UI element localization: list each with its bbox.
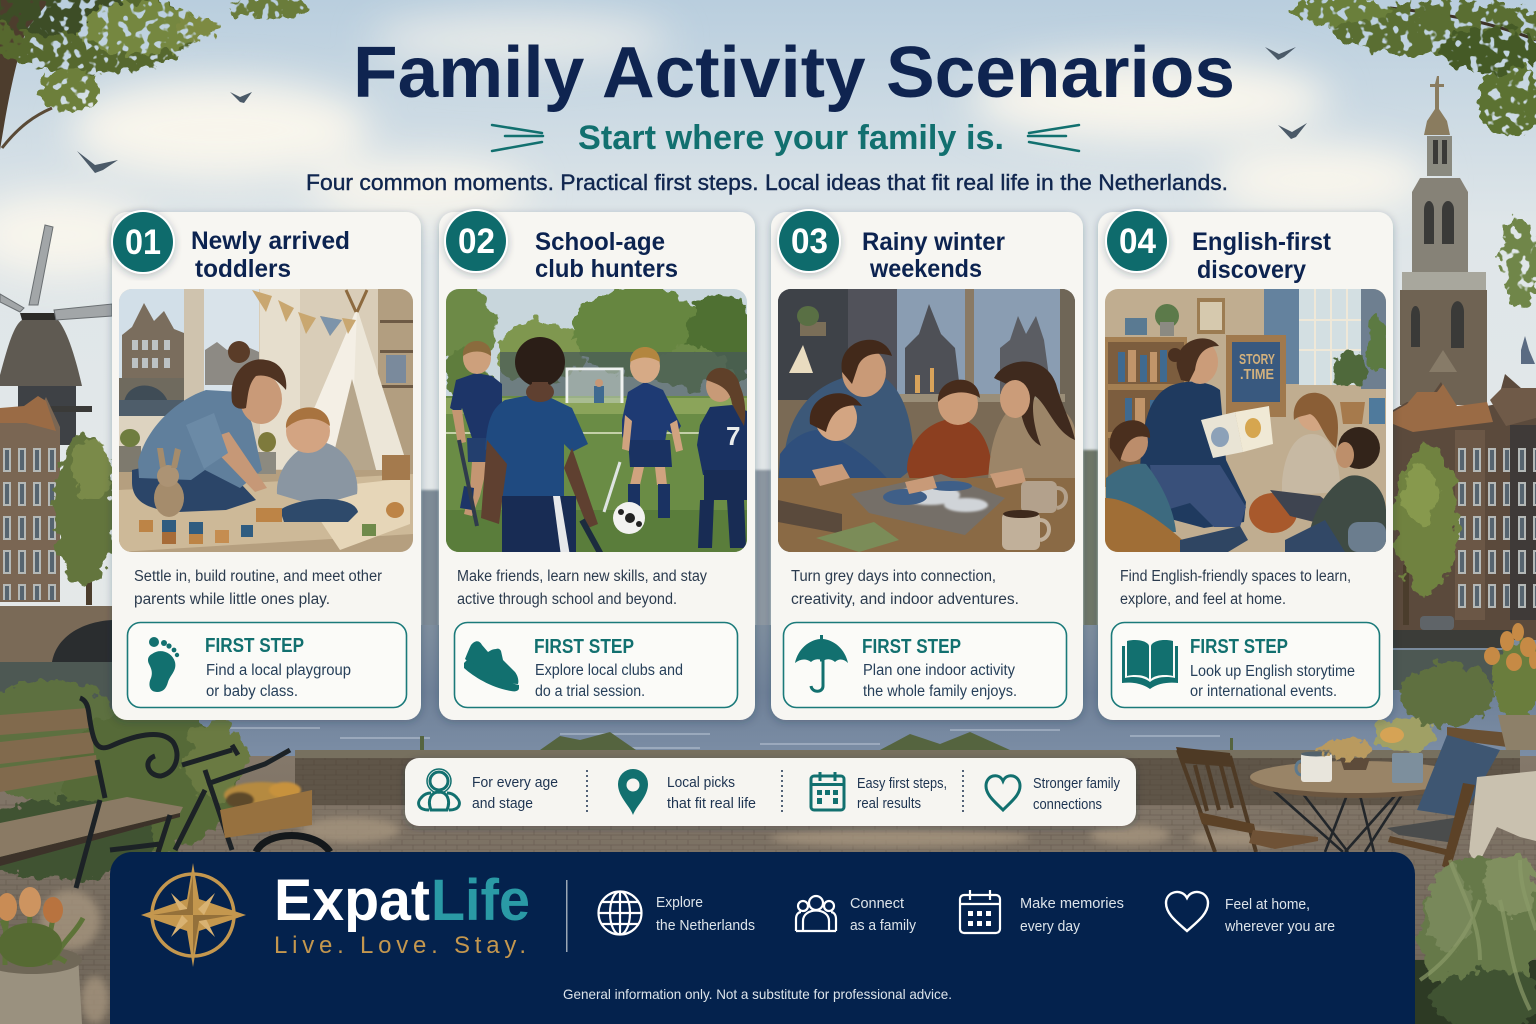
footer text [1224,897,1335,935]
first step box [1112,622,1380,708]
subtitle: Start where your family is. [578,119,1004,157]
card background [1098,212,1393,720]
icon: calendar [960,890,1000,933]
first step text: the whole family enjoys. [863,683,1017,700]
footer text [656,895,755,934]
card heading: club hunters [535,255,678,283]
first step label: FIRST STEP [862,636,961,658]
footer text: the Netherlands [656,918,755,934]
bird [1278,123,1307,139]
brand name: Expat [274,868,430,933]
quay wall [295,732,1520,805]
first step box [784,622,1066,708]
description: Settle in, build routine, and meet other [134,568,382,585]
footer text: wherever you are [1224,919,1335,935]
bridge [0,606,112,662]
first step label: FIRST STEP [534,636,634,658]
description: Make friends, learn new skills, and stay [457,568,707,585]
right chair with cushion [1387,727,1510,870]
near-bank dark water [0,650,1513,710]
right canal houses [1393,336,1536,648]
first step text: Plan one indoor activity [863,662,1015,679]
first step text [863,662,1017,700]
first step label: FIRST STEP [205,635,304,657]
number badge 03: 03 [791,222,828,261]
benefit text: Local picks [667,775,735,791]
story time board [1239,354,1275,379]
cafe table [1250,761,1464,852]
left canal houses [0,396,60,602]
benefit text: For every age [472,775,558,791]
hazy buildings between cards [421,450,1098,640]
right flourish [1028,125,1079,151]
icon: heart [1166,892,1208,931]
icon: open book [1122,640,1178,689]
footer text: as a family [850,918,917,934]
first step label: FIRST STEP [1190,636,1288,658]
card background [112,212,421,720]
footer text: Explore [656,895,703,911]
card heading: Rainy winter [862,228,1005,256]
top-right tulips [1401,623,1536,750]
benefit text: Easy first steps, [857,776,947,792]
photo: children on sports field: 7 [726,421,740,451]
disclaimer: General information only. Not a substitute for professional advice. [563,986,952,1002]
card heading: School-age [535,228,665,256]
first step text [206,662,351,700]
footer band [110,852,1415,1024]
first step text [1190,663,1355,700]
brand name: Life [431,868,530,933]
card heading: English-first [1192,228,1332,256]
wooden bench [0,698,183,888]
benefits strip [405,758,1136,826]
card heading: weekends [869,255,982,283]
brand name [274,868,530,933]
card background [439,212,755,720]
water ripples [200,728,1220,748]
description: Turn grey days into connection, [791,568,996,585]
number badge 02 [444,209,508,273]
card heading: Newly arrived [191,227,350,255]
bridge arch [52,620,112,662]
first step text: Explore local clubs and [535,662,683,679]
card heading [191,227,350,283]
footer text [850,896,917,934]
title: Family Activity Scenarios [353,33,1235,113]
benefit text [857,776,947,812]
icon: umbrella [795,635,848,691]
benefit text [472,775,558,812]
benefit text: that fit real life [667,796,756,812]
icon: globe [598,891,642,935]
water [0,625,1536,760]
card heading [862,228,1005,283]
photo: children on sports field [446,289,747,552]
description: active through school and beyond. [457,591,677,608]
first step text: Look up English storytime [1190,663,1355,680]
icon: footprint [148,637,179,692]
footer text [1020,896,1124,935]
icon: people [419,769,459,810]
card heading [535,228,678,283]
description: explore, and feel at home. [1120,591,1286,608]
icon: sneaker [464,641,519,691]
first step text: or international events. [1190,683,1337,700]
cafe chair [1176,747,1318,852]
description [457,568,707,608]
photo: story time reading [1105,289,1390,552]
footer text: Make memories [1020,896,1124,912]
right fern plant [1415,855,1536,1024]
brand tagline: Live. Love. Stay. [274,932,526,959]
description: creativity, and indoor adventures. [791,591,1019,608]
description: parents while little ones play. [134,591,330,608]
photo: family doing a puzzle [778,289,1075,552]
top-right tree [1290,0,1536,306]
first step text: or baby class. [206,683,298,700]
left tree [54,434,114,605]
footer text: Feel at home, [1225,897,1310,913]
top-left tree [0,0,310,150]
icon: family [796,896,836,931]
first step text: Find a local playgroup [206,662,351,679]
card heading: toddlers [195,255,291,283]
icon: heart [986,776,1020,810]
bottom-left tulip pot [0,887,83,1024]
first step box [454,622,738,708]
photo: mother and toddler playing [119,289,413,552]
description [134,568,382,608]
number badge 04 [1105,209,1169,273]
bird [230,92,252,103]
story time board: STORY [1239,351,1275,368]
number badge 01 [111,210,175,274]
right tree [1394,446,1458,625]
windmill [0,225,112,445]
benefit text [667,775,756,812]
blanket [1469,771,1536,867]
first step text: do a trial session. [535,683,645,700]
card heading [1192,228,1332,284]
left flourish [492,125,543,151]
number badge 02: 02 [458,222,495,261]
benefit text: Stronger family [1033,776,1121,792]
card heading: discovery [1197,256,1306,284]
bird [1265,47,1296,60]
panel: card 1 newly arrived toddlers [111,210,421,720]
footer text: every day [1020,919,1081,935]
footer text: Connect [850,896,904,912]
icon: calendar [811,772,844,810]
panel: card 4 english-first discovery [1098,209,1393,720]
church tower [1400,76,1487,405]
number badge 01: 01 [125,223,161,262]
panel: card 3 rainy winter weekends [771,209,1083,720]
card background [771,212,1083,720]
mug [1296,752,1332,782]
description [1120,568,1351,608]
story time board: .TIME [1240,366,1274,383]
compass logo [141,863,246,967]
first step box [128,622,406,708]
first step text [535,662,683,700]
number badge 04: 04 [1119,222,1157,261]
tagline: Four common moments. Practical first steps. Local ideas that fit real life in the Netherlands. [306,170,1228,195]
benefit text: real results [857,796,921,812]
description [791,568,1019,608]
paving [0,756,1536,1024]
bicycle [175,745,330,852]
description: Find English-friendly spaces to learn, [1120,568,1351,585]
left bushes [0,678,245,880]
flower pots [1319,717,1435,783]
number badge 03 [777,209,841,273]
bird [77,151,118,173]
benefit text: and stage [472,796,533,812]
paving light patches [40,817,1290,1024]
benefit text [1033,776,1121,813]
panel: card 2 school-age club hunters [436,209,758,720]
icon: location pin [618,769,648,815]
benefit text: connections [1033,797,1102,813]
